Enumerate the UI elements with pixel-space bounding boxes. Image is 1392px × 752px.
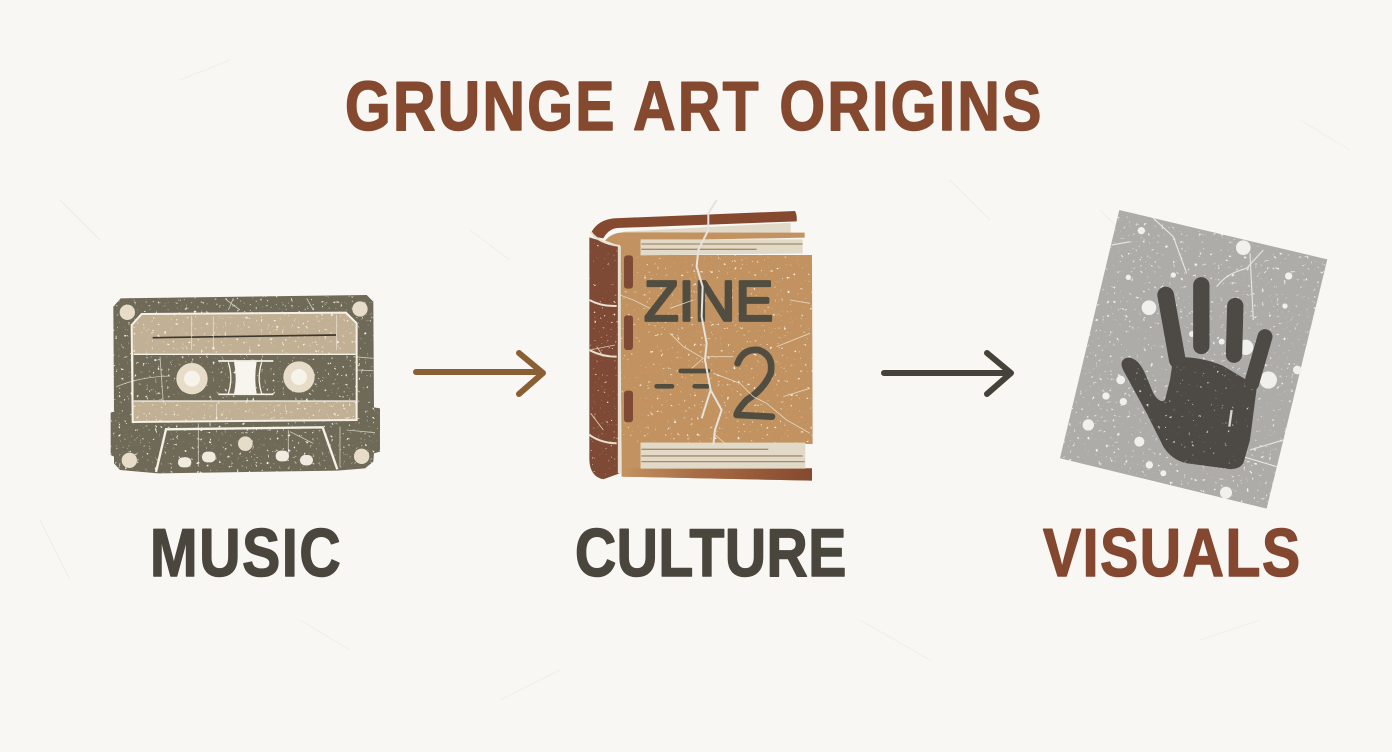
icon: zine book [589,200,813,481]
distress speckle [111,295,380,473]
bottom pages [641,443,805,469]
bottom holes [178,451,313,467]
hand mark [1229,410,1232,427]
paper speckle [1060,210,1327,509]
cassette body [111,295,380,473]
grey paper [1060,210,1327,509]
cassette dark tape window band [134,354,356,401]
cover [605,232,813,481]
top pages [623,223,791,233]
right reel [283,361,315,393]
crack [697,200,722,445]
distress marks [117,298,375,467]
bottom cover strip [622,468,812,481]
centre tape window [218,361,273,394]
cassette label panel [132,313,357,422]
label line [153,335,336,338]
stitches [624,255,633,422]
cover text: dashes [657,371,708,386]
arrow: culture to visuals [884,353,1011,394]
paper cracks [1112,218,1283,467]
cover text: ZINE: ZINE [644,270,773,333]
spine bands [589,232,620,443]
back cover top [592,211,797,238]
left reel [176,363,208,394]
lower trapezoid outline [156,427,337,472]
cover text: 2 [737,350,772,417]
ring finger [1234,306,1235,355]
palm and thumb [1122,357,1257,469]
band edge lines [134,354,356,401]
hand print [1122,285,1265,469]
cover edge [615,246,624,473]
label: culture: CULTURE [575,515,846,591]
spine speckle [589,237,620,479]
icon: handprint on paper [1060,210,1327,509]
spine [589,237,620,479]
bottom page lines [641,449,805,462]
index finger [1166,295,1177,360]
paper splatter [1083,227,1302,499]
top page block [641,239,803,255]
arrow: music to culture [416,353,543,394]
fine cracks [590,295,810,445]
label: visuals: VISUALS [1043,515,1300,591]
little finger [1252,337,1265,383]
label: music: MUSIC [150,515,341,591]
middle finger [1177,285,1226,346]
cover speckle [620,255,813,444]
corner screws [120,301,369,468]
hand speckle [1122,357,1257,469]
title: GRUNGE ART ORIGINS [345,66,1041,145]
top page lines [641,244,803,249]
icon: cassette tape [111,295,380,473]
